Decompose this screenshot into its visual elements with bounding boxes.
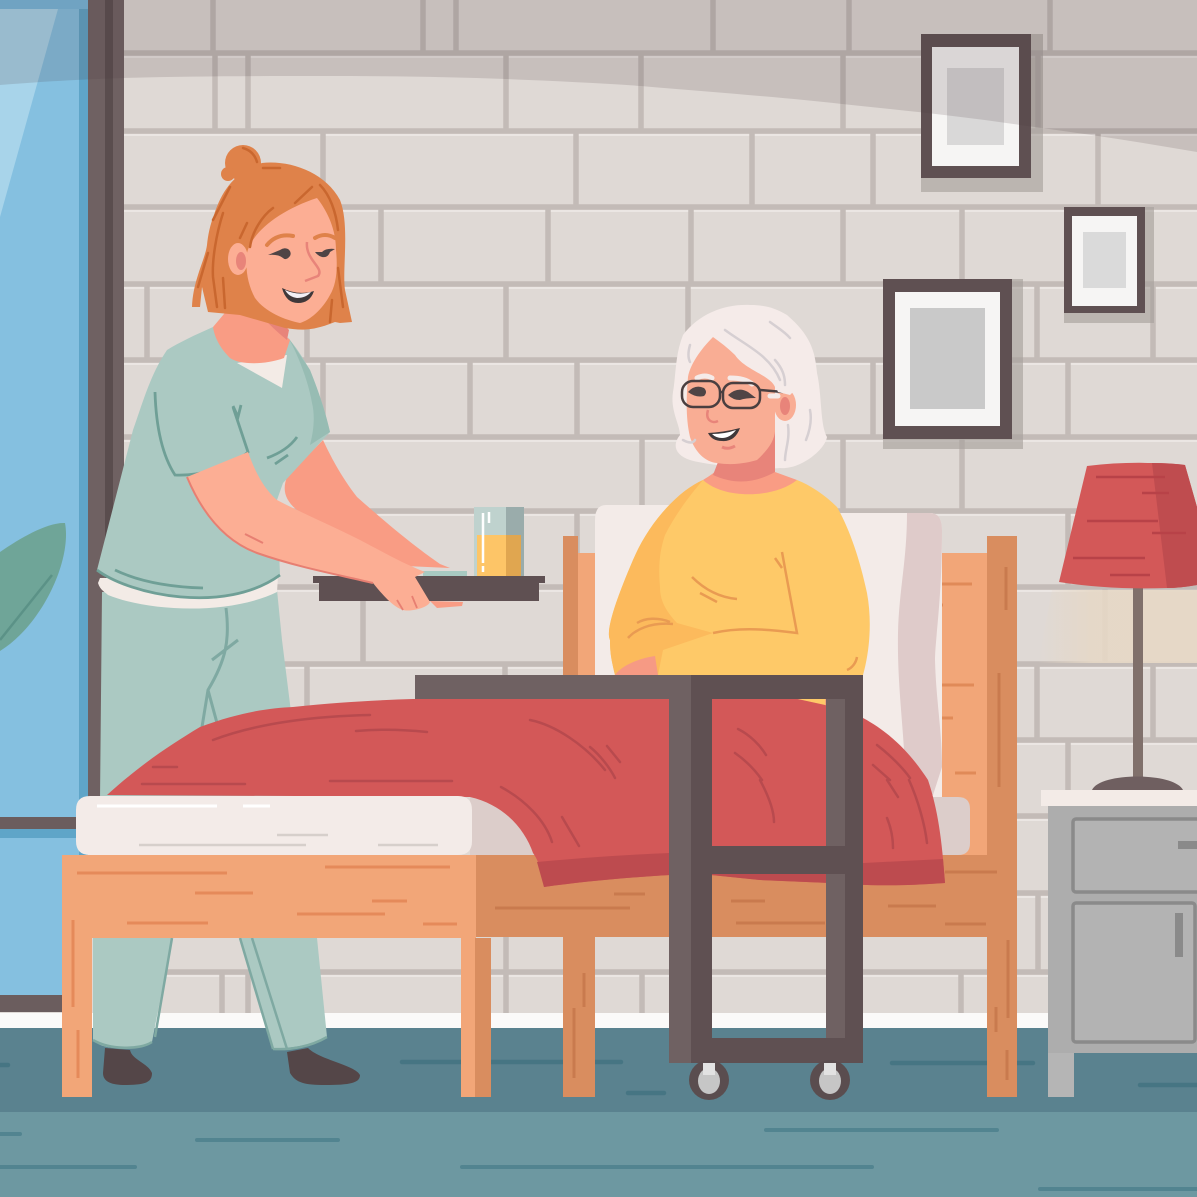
tray with juice glass: [187, 452, 545, 611]
nurse hair: [192, 145, 352, 330]
window frame post: [88, 0, 124, 810]
mattress front: [76, 796, 472, 855]
bed footboard and legs: [62, 855, 1017, 1097]
nurse waistband: [98, 576, 278, 608]
patient hair front: [683, 312, 811, 460]
patient hair back: [672, 305, 827, 468]
mattress side: [470, 797, 970, 855]
patient: [609, 305, 870, 705]
pillow right: [840, 513, 942, 800]
floor: [0, 1013, 1197, 1197]
over-bed table: [415, 675, 863, 1100]
lamp light glow: [1038, 590, 1197, 663]
nurse face: [198, 148, 343, 323]
nurse scrub top: [97, 327, 330, 598]
nurse: [93, 145, 450, 1085]
plant leaf: [0, 523, 66, 651]
nurse far arm: [285, 440, 450, 568]
blanket: [107, 698, 945, 887]
picture frame: large top: [921, 34, 1043, 192]
table wheels: [689, 1060, 850, 1100]
far hand fingers: [430, 601, 463, 608]
ceiling shadow: [0, 0, 1197, 152]
nurse hair strands: [198, 148, 343, 322]
window: [0, 0, 88, 1012]
bed headboard: [563, 536, 1017, 866]
table lamp: [1059, 463, 1197, 790]
patient glasses: [682, 381, 783, 408]
picture frame: small right: [1064, 207, 1154, 323]
patient sweater: [609, 480, 870, 705]
nurse near arm and hand: [187, 452, 430, 611]
nurse neck and collar: [213, 283, 290, 388]
patient face: [687, 337, 796, 464]
bed side rail: [476, 855, 1017, 937]
plate: [423, 571, 467, 577]
patient neck: [703, 430, 797, 494]
pillow left: [595, 505, 690, 680]
picture frame: middle: [883, 279, 1023, 449]
nightstand: [1041, 790, 1197, 1097]
nurse legs and feet: [93, 590, 360, 1085]
juice glass: [474, 507, 524, 577]
